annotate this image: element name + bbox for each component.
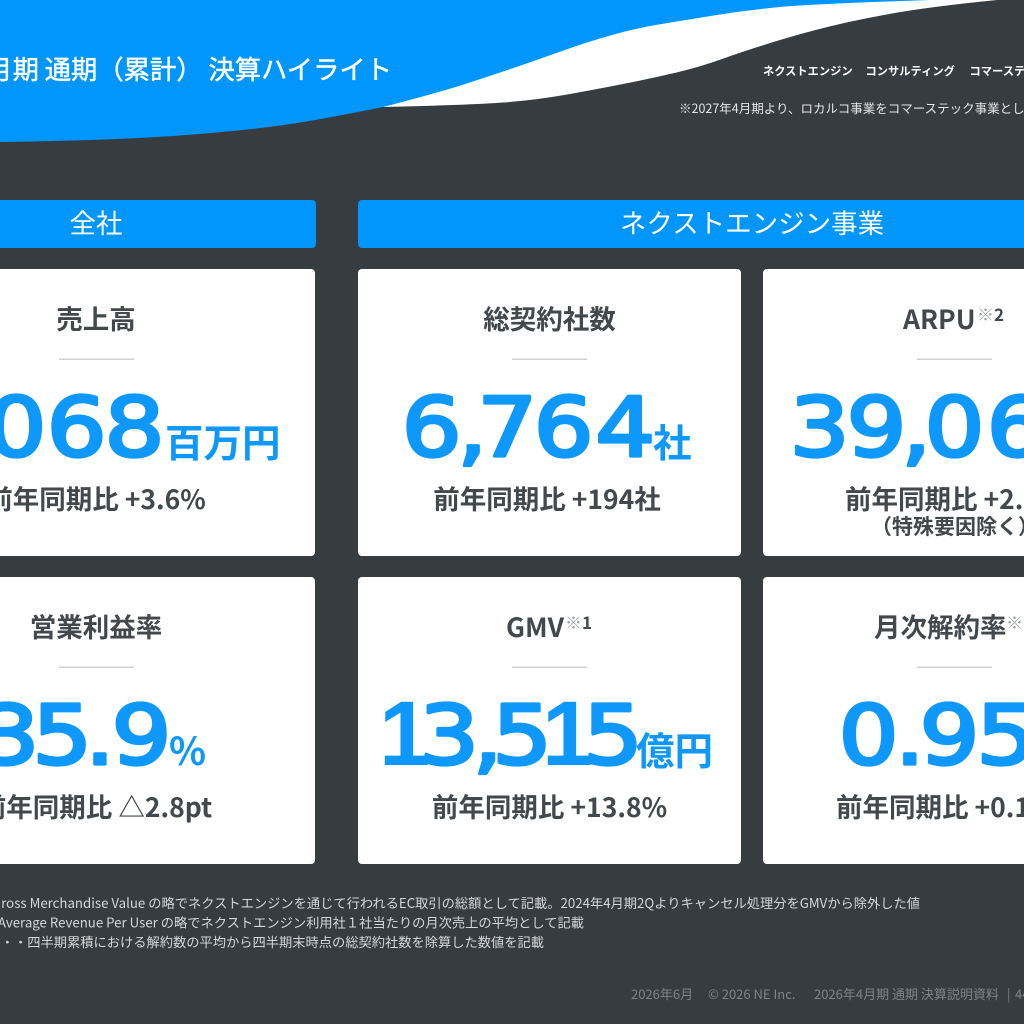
footnotes: ross Merchandise Value の略でネクストエンジンを通じて行われるEC取引の総額として記載。2024年4月期2Qよりキャンセル処理分をGMVから除外した値: [1, 893, 920, 912]
panel: total contracted companies: 社: [653, 413, 692, 469]
panel: operating margin: [0, 577, 315, 864]
panel: ARPU: [763, 269, 1024, 556]
panel: revenue: 売上高: [56, 298, 136, 337]
footnotes: [0, 893, 920, 951]
band: Next Engine business: [358, 200, 1024, 248]
footnotes: ・・四半期累積における解約数の平均から四半期末時点の総契約社数を除算した数値を記載: [1, 932, 544, 951]
band: company-wide: 全社: [70, 202, 122, 241]
panel: GMV: 1: [379, 683, 430, 785]
panel: total contracted companies: 総契約社数: [483, 298, 616, 337]
header business navigation: コンサルティング: [866, 63, 955, 79]
panel: total contracted companies: 前年同期比 +194社: [433, 478, 661, 517]
band: Next Engine business: ネクストエンジン事業: [620, 202, 884, 241]
panel: GMV: 前年同期比 +13.8%: [432, 786, 667, 825]
panel: monthly churn rate: 月次解約率: [874, 606, 1006, 645]
panel: GMV: 5: [583, 688, 643, 783]
panel: GMV: 3,5: [419, 688, 552, 783]
panel: ARPU: ※2: [977, 301, 1004, 326]
page footer: © 2026 NE Inc.: [708, 984, 795, 1003]
panel: revenue: 百万円: [165, 413, 281, 469]
header wave: [0, 0, 997, 142]
header business navigation: ネクストエンジン: [763, 63, 853, 79]
panel: GMV: [358, 577, 741, 864]
page footer: 2026年4月期 通期 決算説明資料: [814, 984, 999, 1003]
panel: monthly churn rate: [763, 577, 1024, 864]
panel: GMV: ※1: [565, 609, 592, 634]
panel: GMV: 億円: [636, 721, 713, 777]
footnotes: Average Revenue Per User の略でネクストエンジン利用社１社当たりの月次売上の平均として記載: [0, 912, 584, 932]
panel: ARPU: 前年同期比 +2.: [845, 478, 1023, 517]
panel: operating margin: %: [169, 721, 206, 777]
page footer: 2026年6月: [631, 984, 693, 1003]
page footer: |: [1007, 984, 1011, 1003]
panel: ARPU: ARPU: [902, 298, 976, 337]
panel: revenue: [0, 269, 315, 556]
panel: total contracted companies: [358, 269, 741, 556]
panel: GMV: 1: [542, 683, 593, 785]
band: company-wide: [0, 200, 316, 248]
panel: total contracted companies: 6,764: [402, 380, 655, 475]
panel: GMV: GMV: [506, 606, 565, 645]
panel: operating margin: 営業利益率: [30, 606, 162, 645]
panel: monthly churn rate: ※: [1006, 609, 1023, 634]
